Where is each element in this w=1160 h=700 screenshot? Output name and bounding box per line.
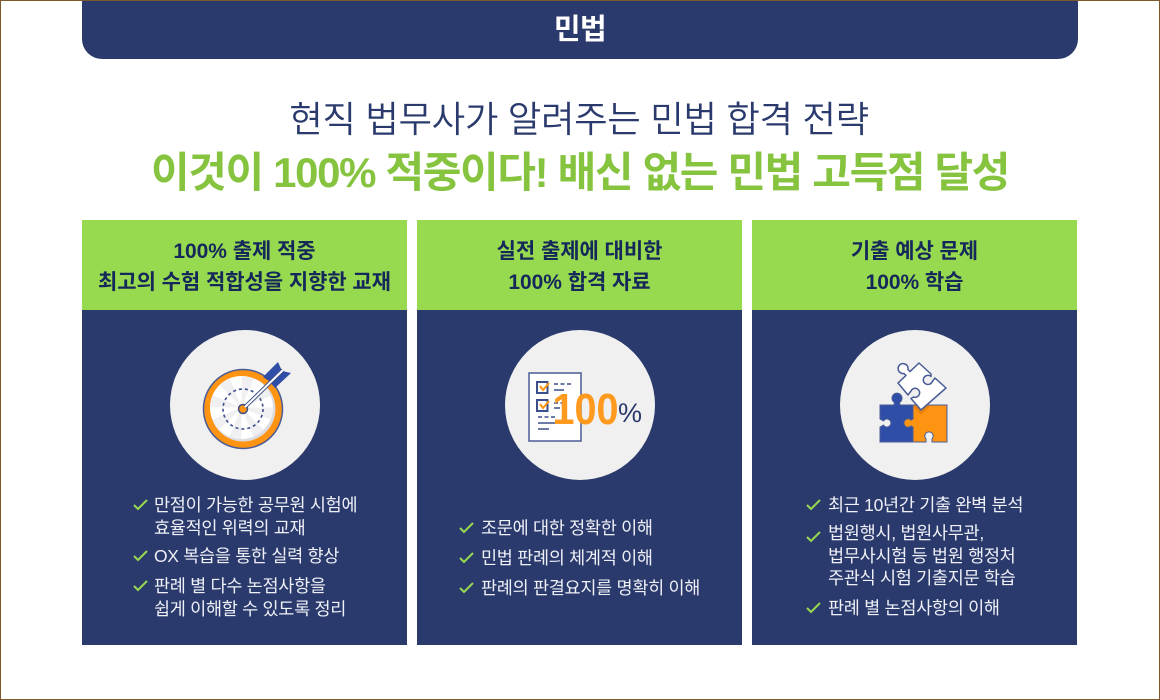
panel: past questions [752, 220, 1077, 645]
check icon 3 [133, 580, 148, 592]
check icon 3 [459, 582, 474, 594]
list item 2: 민법 판례의 체계적 이해 [481, 548, 653, 568]
list item 2: 주관식 시험 기출지문 학습 [828, 568, 1016, 588]
panel: pass material [417, 220, 742, 645]
list item 2: OX 복습을 통한 실력 향상 [154, 546, 339, 566]
list item 1: 조문에 대한 정확한 이해 [481, 518, 653, 538]
check icon 2 [133, 550, 148, 562]
panel heading [417, 220, 742, 310]
list item 3 [154, 576, 346, 618]
panel heading: 기출 예상 문제 [851, 240, 978, 263]
list item 1 [154, 495, 357, 538]
check icon 1 [806, 499, 821, 510]
list item 2 [828, 523, 1016, 588]
panel heading [82, 220, 407, 310]
panel heading: 실전 출제에 대비한 [497, 240, 662, 263]
icon: checklist 100%: % [618, 398, 642, 428]
check icon 2 [459, 552, 474, 564]
list item 2: 법원행시, 법원사무관, [828, 523, 984, 543]
list item 2: 법무사시험 등 법원 행정처 [828, 546, 1016, 566]
check icon 3 [806, 602, 821, 614]
icon: checklist 100%: 100 [552, 384, 619, 433]
panel heading: 100% 합격 자료 [508, 271, 651, 294]
check icon 1 [459, 522, 474, 534]
panel heading [752, 220, 1077, 310]
list item 3: 판례 별 다수 논점사항을 [154, 576, 326, 596]
check icon 1 [133, 499, 148, 510]
list item 1: 효율적인 위력의 교재 [154, 518, 305, 538]
panel heading: 최고의 수험 적합성을 지향한 교재 [98, 271, 391, 294]
list item 3: 판례의 판결요지를 명확히 이해 [481, 578, 700, 598]
icon: puzzle pieces [840, 330, 990, 480]
panel heading: 100% 출제 적중 [173, 240, 316, 263]
subtitle: 현직 법무사가 알려주는 민법 합격 전략 [289, 99, 869, 140]
panel heading: 100% 학습 [866, 271, 963, 294]
icon: target with arrow [170, 330, 320, 480]
panel: exam accuracy [82, 220, 407, 645]
list item 3: 판례 별 논점사항의 이해 [828, 598, 1000, 618]
icon: checklist 100% [505, 330, 655, 480]
check icon 2 [806, 531, 821, 542]
title bar: 민법 [82, 0, 1078, 59]
list item 1: 만점이 가능한 공무원 시험에 [154, 495, 357, 515]
headline: 이것이 100% 적중이다! 배신 없는 민법 고득점 달성 [151, 149, 1009, 196]
title bar: 민법: 민법 [554, 14, 606, 46]
list item 3: 쉽게 이해할 수 있도록 정리 [154, 598, 346, 618]
list item 1: 최근 10년간 기출 완벽 분석 [828, 495, 1023, 515]
